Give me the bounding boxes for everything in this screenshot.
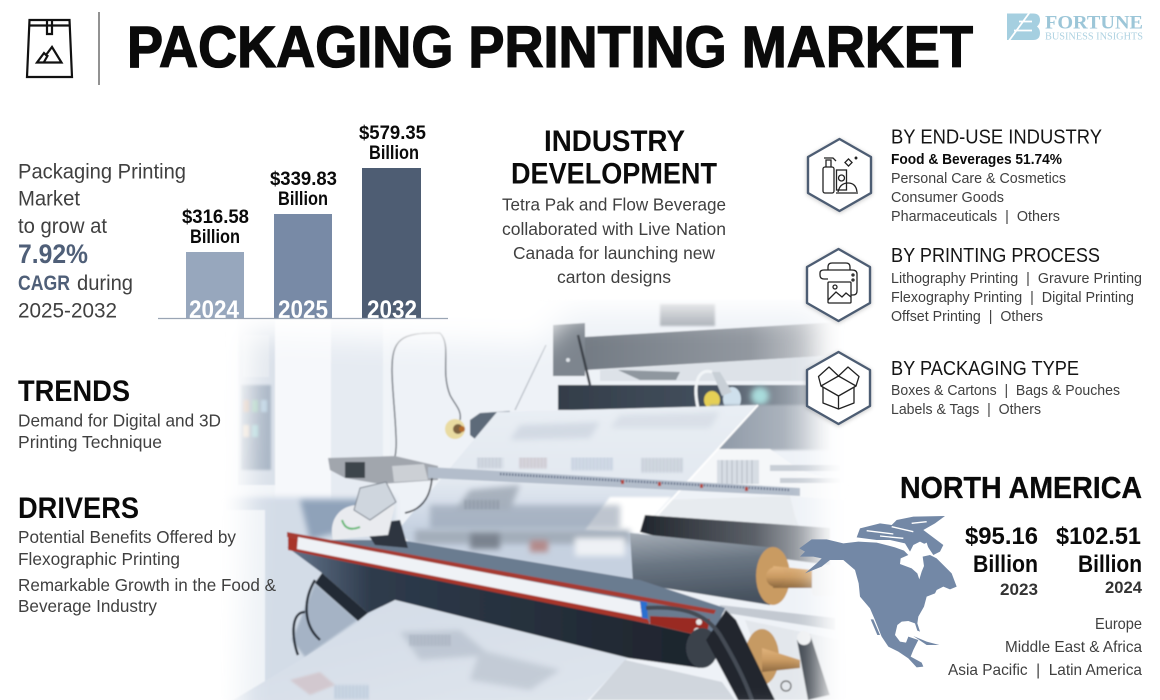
panel: by packaging type: Labels & Tags | Others	[891, 401, 1041, 418]
cable and arm	[646, 608, 775, 700]
panel: CAGR growth text: CAGR	[18, 271, 70, 295]
bar 2025: 2025	[278, 296, 328, 324]
panel: North America figures: $95.16	[965, 523, 1038, 550]
panel: North America figures: $102.51	[1056, 523, 1141, 550]
logo mark	[1007, 12, 1040, 42]
panel: industry development: carton designs	[557, 267, 671, 287]
panel: by printing process: Lithography Printing | Gravure Printing	[891, 270, 1142, 287]
lower roller with tan end	[630, 515, 836, 630]
panel: trends: Printing Technique	[18, 432, 162, 452]
top roller	[391, 333, 830, 461]
header divider	[98, 12, 100, 85]
bar 2025	[270, 169, 337, 324]
logo: Fortune Business Insights	[1007, 12, 1143, 42]
panel: CAGR growth text: during	[77, 271, 133, 295]
bar chart: market size	[158, 123, 448, 324]
panel: CAGR growth text: Packaging Printing	[18, 160, 186, 184]
panel: industry development: Tetra Pak and Flow Beverage	[502, 194, 726, 214]
bottom paper web	[225, 600, 628, 700]
bar 2024: 2024	[189, 296, 239, 324]
bar 2024: Billion	[190, 227, 240, 248]
icon: printer hexagon	[807, 249, 870, 321]
panel: by end-use industry	[891, 126, 1102, 225]
panel: by printing process	[891, 244, 1142, 325]
header icon: bag with picture	[27, 20, 72, 77]
front bar: red strip, white bar, blue cap	[287, 532, 725, 637]
panel: CAGR growth text: to grow at	[18, 214, 107, 238]
panel: industry development: Canada for launching new	[513, 243, 715, 263]
panel: drivers: Flexographic Printing	[18, 549, 180, 569]
lower right base and tan hub	[590, 620, 840, 700]
panel: by end-use industry: Personal Care & Cosmetics	[891, 170, 1066, 187]
panel: by printing process: Flexography Printing | Digital Printing	[891, 289, 1134, 306]
map: North America	[799, 516, 957, 667]
panel: industry development: collaborated with Live Nation	[502, 219, 726, 239]
panel: by printing process: Offset Printing | Others	[891, 308, 1043, 325]
panel: trends: TRENDS	[18, 375, 130, 408]
title: PACKAGING PRINTING MARKET	[127, 15, 973, 80]
icon: personal care hexagon	[808, 139, 871, 211]
panel: CAGR growth text: Market	[18, 186, 80, 210]
panel: North America figures: 2024	[1105, 578, 1143, 597]
panel: by printing process: BY PRINTING PROCESS	[891, 244, 1100, 267]
panel: industry development: INDUSTRY	[544, 125, 685, 158]
bar 2024: $316.58	[182, 207, 249, 228]
panel: by end-use industry: Food & Beverages 51.74%	[891, 151, 1062, 168]
bar 2032	[359, 123, 426, 324]
logo text: FORTUNE	[1045, 12, 1143, 34]
bar 2024	[182, 207, 249, 324]
list: other regions	[948, 616, 1142, 679]
logo: Fortune Business Insights: BUSINESS INSIGHTS	[1045, 32, 1143, 42]
upper machine frame	[553, 304, 848, 411]
panel: by packaging type	[891, 357, 1120, 418]
panel: North America figures: Billion	[973, 551, 1038, 578]
list: other regions: Middle East & Africa	[1005, 639, 1142, 656]
bar 2025: Billion	[278, 189, 328, 210]
panel: trends	[18, 375, 221, 452]
bar 2032: 2032	[367, 296, 417, 324]
panel: by packaging type: Boxes & Cartons | Bags & Pouches	[891, 382, 1120, 399]
panel: North America figures	[900, 470, 1143, 599]
panel: CAGR growth text	[18, 160, 186, 322]
panel: by end-use industry: Pharmaceuticals | Others	[891, 208, 1060, 225]
bar 2025: $339.83	[270, 169, 337, 190]
paper wrap over lower roller	[402, 526, 634, 580]
panel: drivers: Remarkable Growth in the Food &	[18, 575, 276, 595]
rail with scale	[428, 467, 800, 496]
panel: CAGR growth text: 2025-2032	[18, 298, 117, 322]
panel: North America figures: Billion	[1078, 551, 1142, 578]
panel: North America figures: 2023	[1000, 580, 1038, 599]
rear white machine parts	[717, 448, 829, 484]
panel: drivers: Beverage Industry	[18, 596, 157, 616]
panel: CAGR growth text: 7.92%	[18, 239, 88, 269]
panel: drivers: Potential Benefits Offered by	[18, 527, 236, 547]
panel: by end-use industry: BY END-USE INDUSTRY	[891, 126, 1102, 148]
panel: drivers: DRIVERS	[18, 492, 139, 525]
bar 2032: Billion	[369, 143, 419, 164]
list: other regions: Europe	[1095, 616, 1142, 633]
cabinet wall	[240, 334, 396, 681]
panel: by packaging type: BY PACKAGING TYPE	[891, 357, 1079, 380]
panel: North America figures: NORTH AMERICA	[900, 470, 1142, 505]
panel: industry development	[502, 125, 726, 287]
panel: drivers	[18, 492, 276, 616]
panel: by end-use industry: Consumer Goods	[891, 189, 1004, 206]
panel: industry development: DEVELOPMENT	[511, 158, 717, 190]
sensor on right of frame	[696, 371, 712, 408]
icon: box hexagon	[807, 352, 870, 424]
background photo: printing press machine	[225, 300, 850, 700]
paper web upper sheet	[398, 405, 758, 534]
clamp assembly	[328, 456, 438, 548]
panel: trends: Demand for Digital and 3D	[18, 410, 221, 430]
bar 2032: $579.35	[359, 123, 426, 144]
list: other regions: Asia Pacific | Latin America	[948, 662, 1142, 679]
black underside of bar	[287, 547, 706, 668]
